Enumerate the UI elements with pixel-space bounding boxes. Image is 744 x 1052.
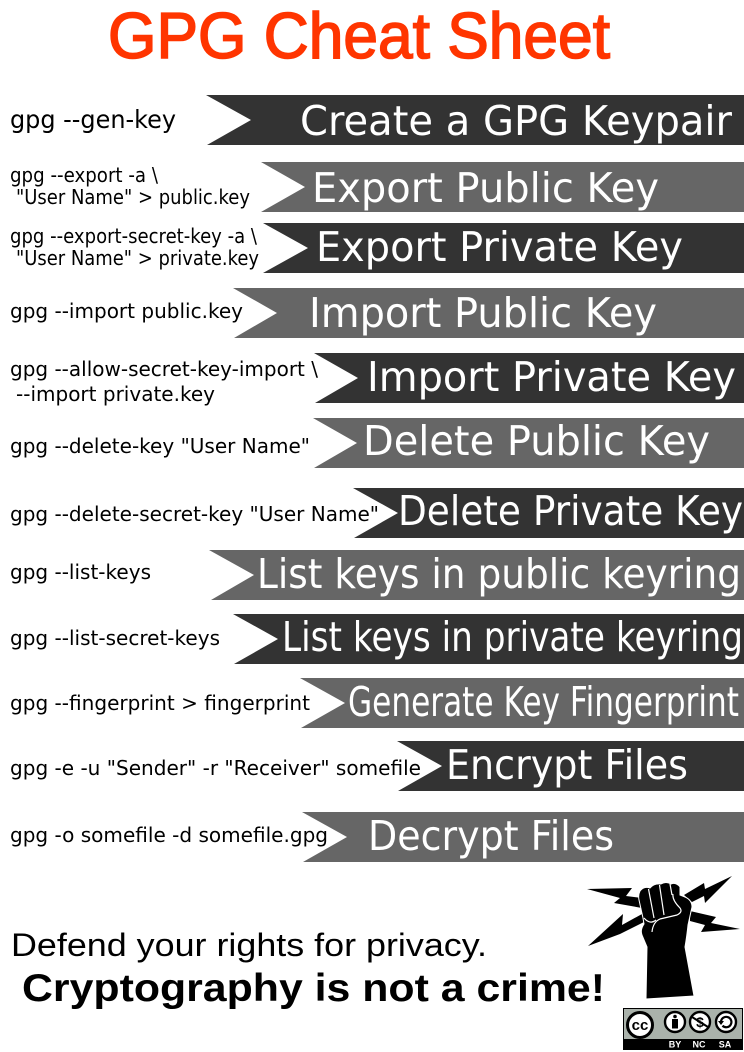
- banner: Encrypt Files: [446, 741, 688, 789]
- banner: [302, 812, 744, 862]
- row: list public keys: [10, 550, 744, 600]
- row: import public key: [10, 288, 744, 338]
- command: --import private.key: [16, 382, 215, 406]
- banner: Create a GPG Keypair: [300, 97, 732, 145]
- command: [10, 163, 250, 209]
- icon: creative commons badge: $: [696, 1014, 704, 1030]
- row: create keypair: [10, 95, 744, 145]
- command: "User Name" > private.key: [16, 246, 259, 270]
- command: gpg --delete-key "User Name": [10, 434, 310, 458]
- row: encrypt files: [10, 741, 744, 791]
- command: [10, 224, 259, 270]
- command: gpg -e -u "Sender" -r "Receiver" somefile: [10, 756, 421, 780]
- icon: creative commons badge: SA: [719, 1040, 732, 1050]
- command: gpg --import public.key: [10, 299, 243, 323]
- command: gpg --gen-key: [10, 105, 176, 134]
- row: import private key: [10, 353, 744, 406]
- command: gpg --export -a \: [10, 163, 158, 187]
- row: export private key: [10, 223, 744, 273]
- title: GPG Cheat Sheet: [108, 0, 610, 72]
- row: delete public key: [10, 417, 744, 468]
- banner: Delete Public Key: [363, 417, 710, 465]
- icon: raised fist with lightning: [587, 876, 740, 999]
- banner: [233, 288, 744, 338]
- command: [10, 357, 318, 406]
- slogan line: Defend your rights for privacy.: [11, 927, 487, 963]
- icon: creative commons badge: NC: [692, 1040, 706, 1050]
- row: list private keys: [10, 613, 744, 664]
- command: gpg --list-secret-keys: [10, 626, 220, 650]
- banner: Import Private Key: [367, 353, 736, 401]
- banner: Export Private Key: [316, 223, 683, 271]
- slogan bold line: Cryptography is not a crime!: [22, 967, 605, 1010]
- row: export public key: [10, 162, 744, 212]
- command: "User Name" > public.key: [16, 185, 250, 209]
- icon: creative commons badge: [623, 1008, 743, 1050]
- command: gpg --delete-secret-key "User Name": [10, 502, 379, 526]
- row: fingerprint: [10, 678, 744, 728]
- command: gpg --list-keys: [10, 560, 151, 584]
- icon: creative commons badge: BY: [669, 1040, 681, 1050]
- command: gpg --fingerprint > fingerprint: [10, 691, 310, 715]
- command: gpg --export-secret-key -a \: [10, 224, 257, 248]
- command: gpg -o somefile -d somefile.gpg: [10, 823, 328, 847]
- banner: Import Public Key: [309, 289, 657, 337]
- row: decrypt files: [10, 812, 744, 862]
- banner: Export Public Key: [312, 164, 659, 212]
- row: delete private key: [10, 487, 744, 538]
- icon: creative commons badge: cc: [632, 1017, 648, 1034]
- banner: Decrypt Files: [368, 812, 614, 860]
- command: gpg --allow-secret-key-import \: [10, 357, 318, 381]
